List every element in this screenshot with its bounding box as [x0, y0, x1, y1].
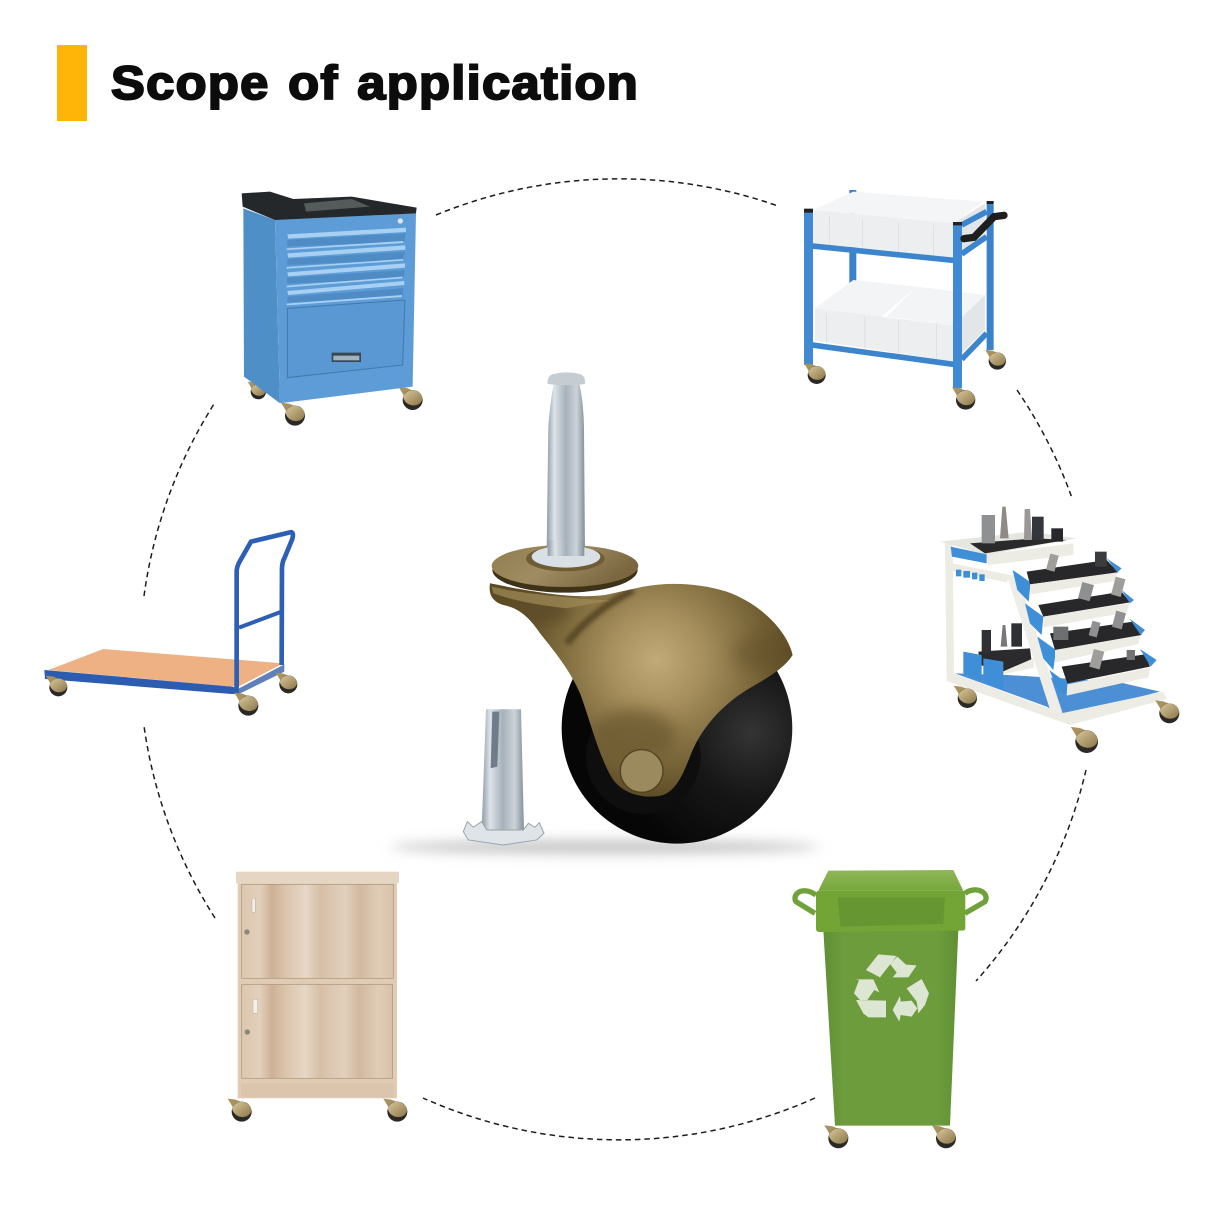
- recycling symbol: [854, 954, 929, 1022]
- tier 2 tray: [1025, 577, 1134, 635]
- tier 3 tray: [1037, 611, 1145, 670]
- product: insert sleeve with teeth: [463, 709, 544, 845]
- application: green recycling bin: [795, 870, 986, 1148]
- application: blue tool cabinet: [242, 192, 423, 426]
- title accent bar: [57, 45, 87, 121]
- tier 4 tray: [1049, 649, 1157, 696]
- product: ball caster with stem: [490, 372, 793, 844]
- application: wooden cabinet: [228, 872, 407, 1122]
- title: Scope of application: [111, 56, 639, 109]
- application: blue cart with white crates: [804, 190, 1006, 410]
- dashed circle connecting the applications: [144, 179, 1086, 1140]
- application: CNC tool rack: [940, 507, 1179, 753]
- tier 1 tray: [1013, 552, 1122, 602]
- product: floor shadow: [390, 840, 820, 854]
- caster axle rivet: [620, 750, 663, 792]
- application: platform hand truck: [44, 532, 297, 716]
